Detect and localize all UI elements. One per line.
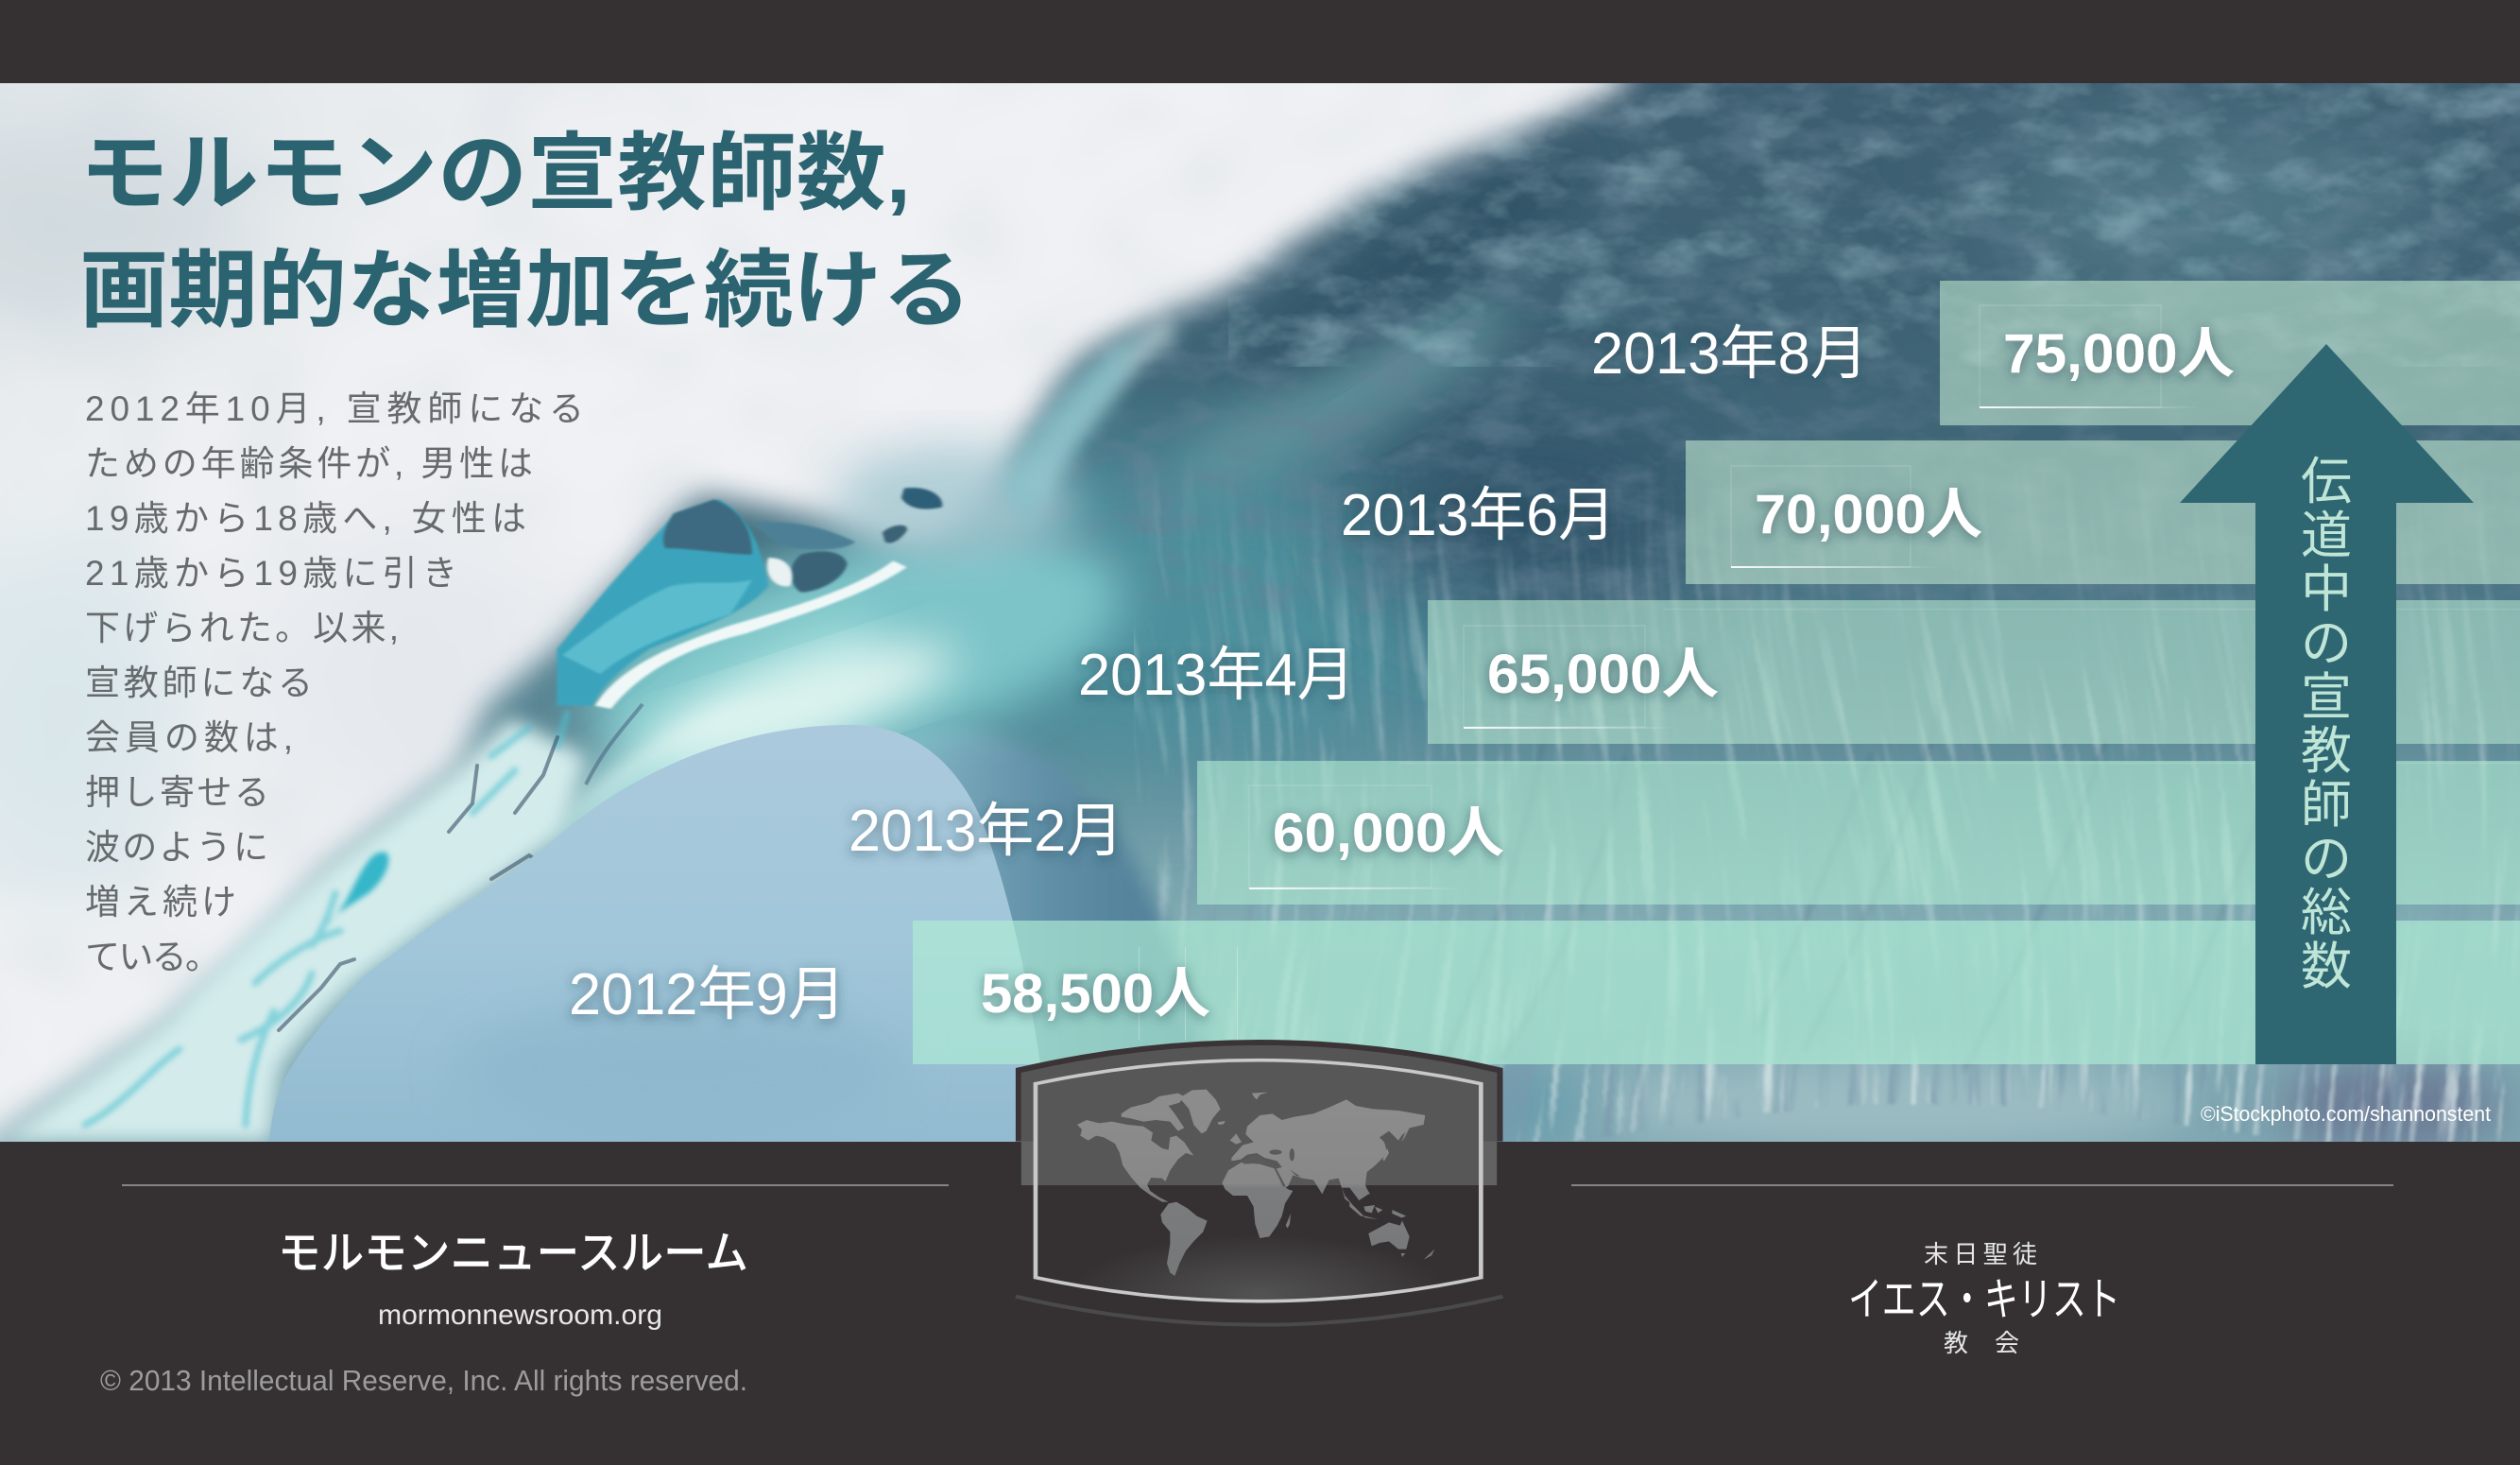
arrow label: 伝道中の宣教師の総数 (2301, 454, 2352, 995)
date labels: 2013年4月 (1078, 643, 1355, 708)
water streak lines (1495, 744, 2229, 1069)
wave barrel (blue tube) (269, 725, 1051, 1144)
intro paragraph: 会員の数は, (85, 718, 293, 757)
church logo (1848, 1240, 2120, 1357)
intro paragraph: 押し寄せる (85, 773, 269, 812)
value labels: 60,000人 (1273, 802, 1504, 864)
arrow: total missionaries (2180, 344, 2474, 1064)
intro paragraph: 波のように (85, 828, 268, 867)
intro paragraph: ている。 (85, 938, 220, 976)
intro paragraph: 増え続け (85, 883, 236, 922)
date labels (569, 321, 1868, 1027)
photo credit: ©iStockphoto.com/shannonstent (2201, 1102, 2491, 1126)
tube shade band (904, 726, 1201, 1062)
bar: 2013年6月 (1686, 440, 2520, 584)
intro paragraph: 19歳から18歳へ, 女性は (85, 499, 526, 538)
intro paragraph: 下げられた。以来, (85, 609, 399, 647)
bar: 2013年2月 (1197, 761, 2520, 905)
bar: 2012年9月 (913, 921, 2520, 1064)
continents (1077, 1090, 1434, 1276)
date labels: 2013年2月 (849, 799, 1123, 864)
intro paragraph: 21歳から19歳に引き (85, 554, 457, 593)
title (79, 127, 971, 338)
date labels: 2013年8月 (1591, 321, 1868, 387)
date labels: 2012年9月 (569, 962, 846, 1027)
intro paragraph: 2012年10月, 宣教師になる (85, 389, 584, 428)
value labels: 75,000人 (2003, 323, 2235, 385)
footer divider right (1571, 1184, 2393, 1186)
bar: 2013年4月 (1428, 600, 2520, 744)
church logo: 末日聖徒 (1924, 1240, 2037, 1268)
value labels: 70,000人 (1755, 484, 1982, 545)
church logo: 教 会 (1944, 1329, 2019, 1357)
foam crest (0, 83, 1648, 1142)
title: モルモンの宣教師数, (79, 127, 911, 221)
top dark band (0, 0, 2520, 83)
ice band lower left (0, 718, 586, 1142)
newsroom name: モルモンニュースルーム (278, 1229, 748, 1279)
mottled foam over the lip (831, 444, 1077, 558)
church logo: イエス・キリスト (1848, 1275, 2120, 1325)
bottom strip streaks (1487, 1064, 2504, 1142)
bar: 2013年8月 (1940, 281, 2520, 425)
copyright: © 2013 Intellectual Reserve, Inc. All rights reserved. (100, 1364, 747, 1397)
wave photo background (0, 26, 2520, 1198)
value labels: 65,000人 (1487, 644, 1719, 705)
intro paragraph: ための年齢条件が, 男性は (85, 444, 533, 483)
inland seas (1241, 1148, 1301, 1187)
title: 画期的な増加を続ける (79, 244, 971, 338)
value labels: 58,500人 (981, 963, 1210, 1025)
intro paragraph: 宣教師になる (85, 664, 313, 702)
aqua sweep under the lip (568, 525, 1141, 759)
footer divider left (122, 1184, 949, 1186)
lip: cyan hollow and dark holes (557, 488, 942, 709)
value labels (981, 323, 2235, 1025)
footer band (0, 1142, 2520, 1465)
date labels: 2013年6月 (1341, 483, 1616, 548)
intro paragraph (85, 389, 584, 976)
newsroom url: mormonnewsroom.org (378, 1300, 662, 1331)
world map emblem (1016, 1040, 1502, 1354)
